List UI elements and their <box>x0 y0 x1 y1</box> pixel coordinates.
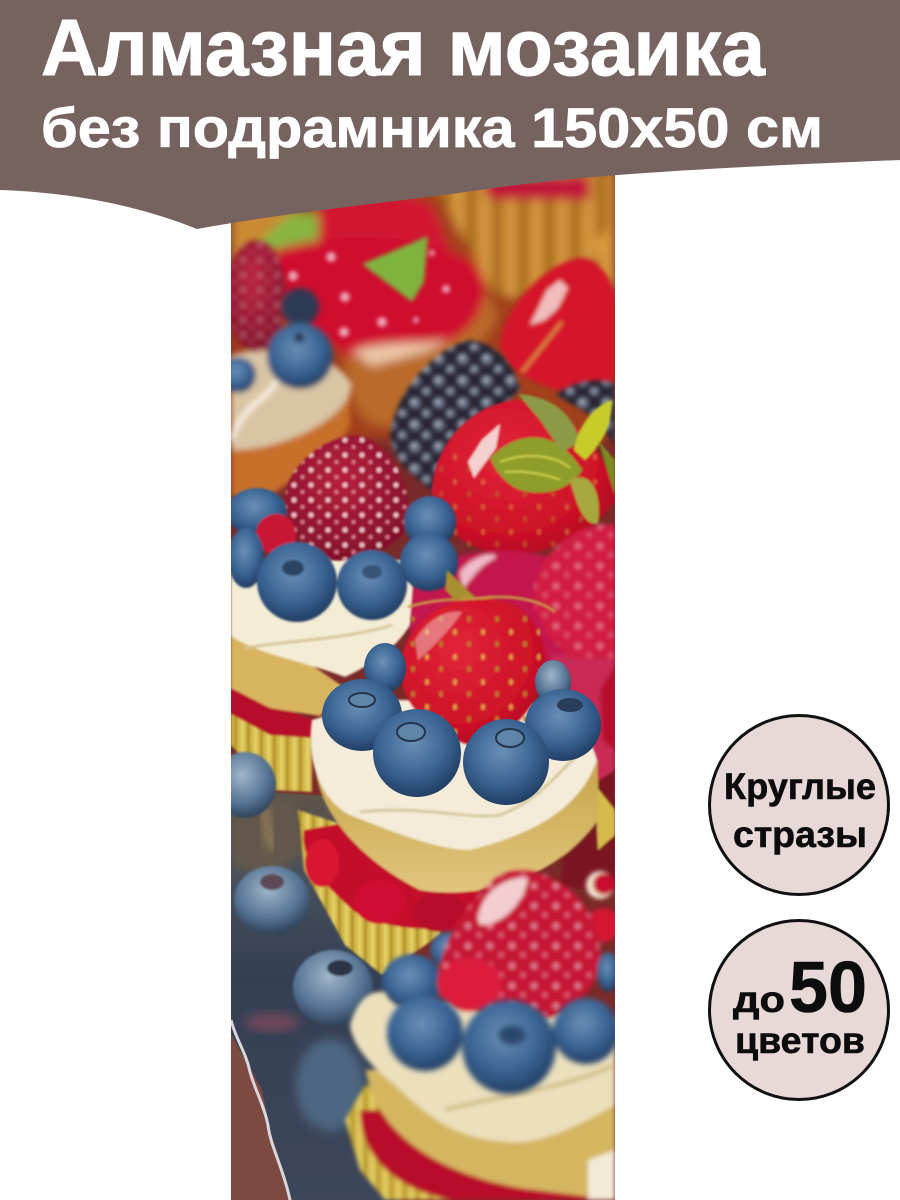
badge: round rhinestones <box>710 716 888 894</box>
loose blueberries on tray <box>231 750 374 1025</box>
badge: round rhinestones: стразы <box>733 814 867 855</box>
badge: up to 50 colours: цветов <box>735 1020 865 1061</box>
main cupcake <box>298 700 615 975</box>
front blurred cupcake <box>345 871 620 1200</box>
blackberries <box>390 340 615 492</box>
main cupcake blueberries <box>322 643 601 805</box>
top right strawberry <box>500 258 615 395</box>
subtitle: без подрамника 150х50 см <box>41 96 823 159</box>
header banner <box>0 0 900 229</box>
front cupcake blueberries <box>387 995 619 1094</box>
background tarts (blurred top area) <box>231 170 615 440</box>
pink syrup and right raspberry <box>405 524 615 800</box>
large strawberry with leaves <box>432 394 615 555</box>
badge: up to 50 colours <box>710 920 888 1100</box>
title: Алмазная мозаика <box>41 3 765 92</box>
main strawberry with calyx <box>400 570 555 745</box>
red tart leaf and glaze dots <box>288 236 450 337</box>
mid-left cupcake <box>231 560 415 792</box>
badge: up to 50 colours: 50 <box>789 948 867 1028</box>
left cupcake: cream, base and berries <box>220 240 352 497</box>
tray surface <box>231 792 400 1200</box>
product photo: berry cupcakes <box>214 170 620 1200</box>
central raspberry and blueberries <box>227 436 458 622</box>
badge: round rhinestones: Круглые <box>724 766 876 807</box>
badge: up to 50 colours: до <box>733 979 785 1020</box>
